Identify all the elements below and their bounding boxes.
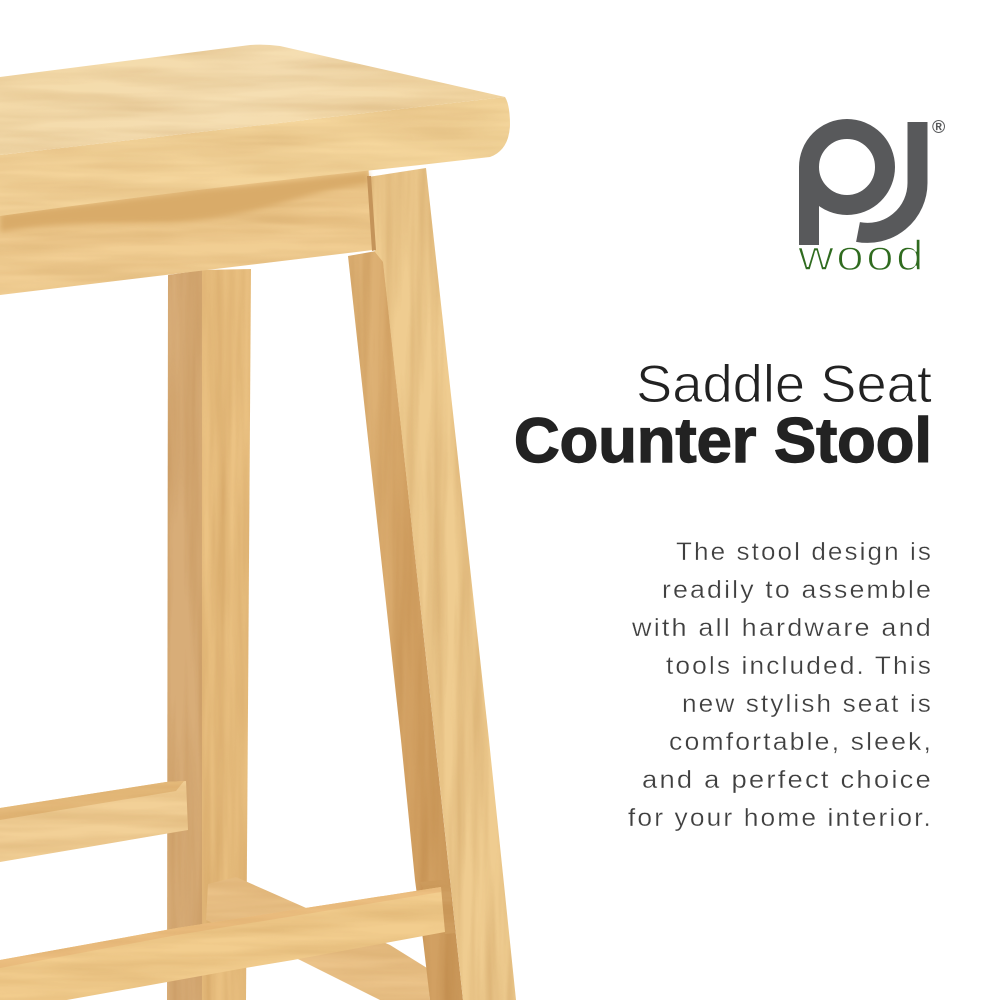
description text: and a perfect choice	[642, 766, 933, 794]
logo letter p	[809, 129, 885, 245]
title line 1: Saddle Seat	[636, 355, 932, 414]
lower front rail	[0, 880, 455, 1000]
logo: pj wood	[797, 117, 945, 280]
apron under seat	[0, 160, 373, 295]
registered mark: ®	[932, 117, 945, 137]
side rail upper	[0, 781, 188, 862]
front leg	[348, 168, 516, 1000]
description text: The stool design is	[676, 538, 933, 566]
description text: new stylish seat is	[682, 690, 933, 718]
apron end shadow	[367, 176, 376, 251]
description text: comfortable, sleek,	[669, 728, 933, 756]
description text: for your home interior.	[628, 804, 933, 832]
apron shadow below seat	[0, 172, 369, 232]
stool photo	[0, 45, 516, 1000]
title	[514, 355, 932, 476]
logo letter j	[858, 122, 918, 233]
title line 2: Counter Stool	[514, 406, 932, 476]
description text: with all hardware and	[631, 614, 933, 642]
description text: tools included. This	[666, 652, 933, 680]
back crossbar	[206, 877, 430, 1000]
logo word wood: wood	[797, 232, 926, 280]
seat top surface	[0, 45, 505, 155]
description text	[628, 538, 933, 832]
description text: readily to assemble	[662, 576, 933, 604]
seat front edge	[0, 97, 510, 216]
back leg	[167, 269, 251, 1000]
